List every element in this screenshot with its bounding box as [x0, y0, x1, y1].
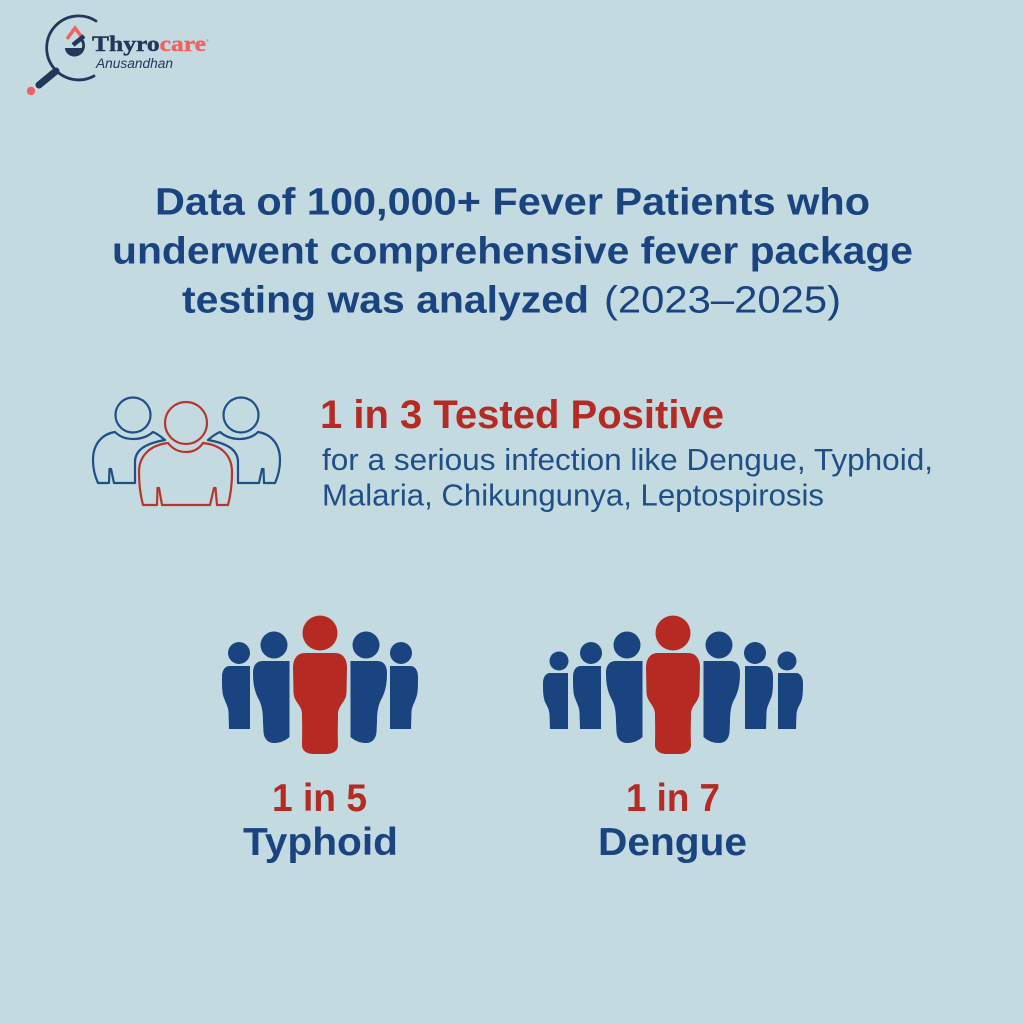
icon: drop and microscope: [65, 28, 84, 56]
icon: seven people, 1 in 7: [543, 616, 803, 754]
title: Data of 100,000+ Fever Patients who: [155, 182, 870, 224]
title: testing was analyzed: [182, 280, 589, 322]
red person: [646, 616, 700, 754]
title: (2023–2025): [604, 280, 841, 322]
right outlined person: [208, 398, 280, 483]
blue people left: [222, 632, 290, 743]
blue people right: [350, 632, 418, 743]
stat: 1 in 5 typhoid: 1 in 5: [272, 777, 367, 820]
stat: 1 in 7 dengue: 1 in 7: [626, 777, 720, 820]
icon: magnifying glass: [27, 16, 96, 95]
stat: 1 in 7 dengue: Dengue: [598, 821, 747, 864]
logo subtitle: Anusandhan: [95, 56, 173, 71]
logo: Thyrocare Anusandhan: [27, 16, 209, 95]
registered mark: ®: [206, 38, 209, 43]
callout body: [322, 443, 933, 512]
blue people right: [704, 632, 803, 743]
blue people left: [543, 632, 642, 743]
stat: 1 in 5 typhoid: [243, 777, 398, 864]
callout heading: 1 in 3 Tested Positive: [320, 393, 724, 437]
stat: 1 in 7 dengue: [598, 777, 747, 864]
red person: [293, 616, 347, 754]
icon: five people, 1 in 5: [222, 616, 418, 754]
stat: 1 in 5 typhoid: Typhoid: [243, 821, 398, 864]
logo wordmark: Thyro care: [92, 31, 206, 56]
left outlined person: [93, 398, 165, 483]
title: [112, 182, 913, 322]
callout: 1 in 3 tested positive: [320, 393, 933, 512]
centre outlined person: [139, 402, 232, 505]
icon: three people outline: [93, 398, 280, 505]
callout body: for a serious infection like Dengue, Typhoid,: [322, 443, 933, 477]
title: underwent comprehensive fever package: [112, 230, 913, 272]
callout body: Malaria, Chikungunya, Leptospirosis: [322, 478, 824, 512]
